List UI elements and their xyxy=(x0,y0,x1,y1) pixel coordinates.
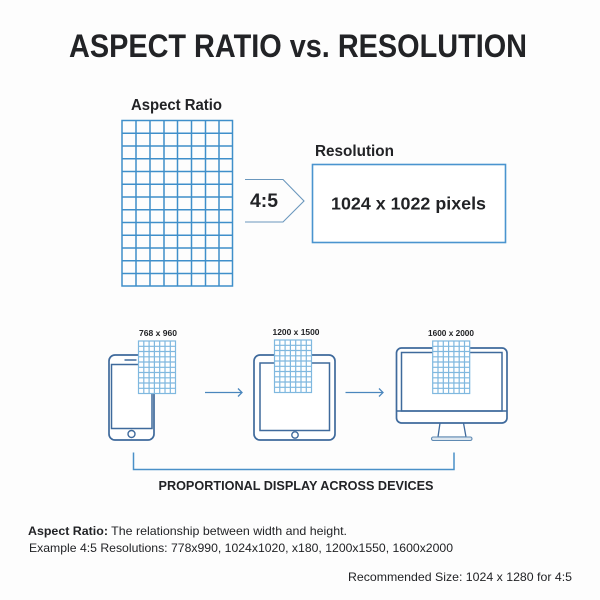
tablet resolution label: 1200 x 1500 xyxy=(272,327,320,337)
phone resolution grid xyxy=(138,328,177,394)
device: tablet xyxy=(254,355,335,440)
definition text xyxy=(28,524,453,555)
bracket connecting devices xyxy=(134,452,454,470)
heading: resolution: Resolution xyxy=(315,143,394,160)
large aspect ratio grid xyxy=(122,120,232,286)
caption: proportional display: PROPORTIONAL DISPLAY ACROSS DEVICES xyxy=(158,479,433,493)
resolution box: 1024 x 1022 pixels xyxy=(331,194,486,214)
monitor resolution grid xyxy=(428,328,474,394)
arrow: phone to tablet xyxy=(205,388,242,396)
resolution box xyxy=(312,164,506,242)
device: monitor xyxy=(396,348,507,440)
recommended size note: Recommended Size: 1024 x 1280 for 4:5 xyxy=(348,570,572,584)
tablet resolution grid xyxy=(272,327,320,392)
heading: aspect ratio: Aspect Ratio xyxy=(131,97,222,114)
device: phone xyxy=(109,355,154,440)
definition text: Example 4:5 Resolutions: 778x990, 1024x1020, x180, 1200x1550, 1600x2000 xyxy=(29,541,453,555)
ratio arrow label: 4:5 xyxy=(250,191,278,212)
ratio arrow label xyxy=(245,180,304,222)
title: ASPECT RATIO vs. RESOLUTION xyxy=(69,28,527,64)
definition text: Aspect Ratio: The relationship between width and height. xyxy=(28,524,347,538)
arrow: tablet to monitor xyxy=(346,388,383,396)
phone resolution label: 768 x 960 xyxy=(139,328,177,338)
monitor resolution label: 1600 x 2000 xyxy=(428,328,474,338)
